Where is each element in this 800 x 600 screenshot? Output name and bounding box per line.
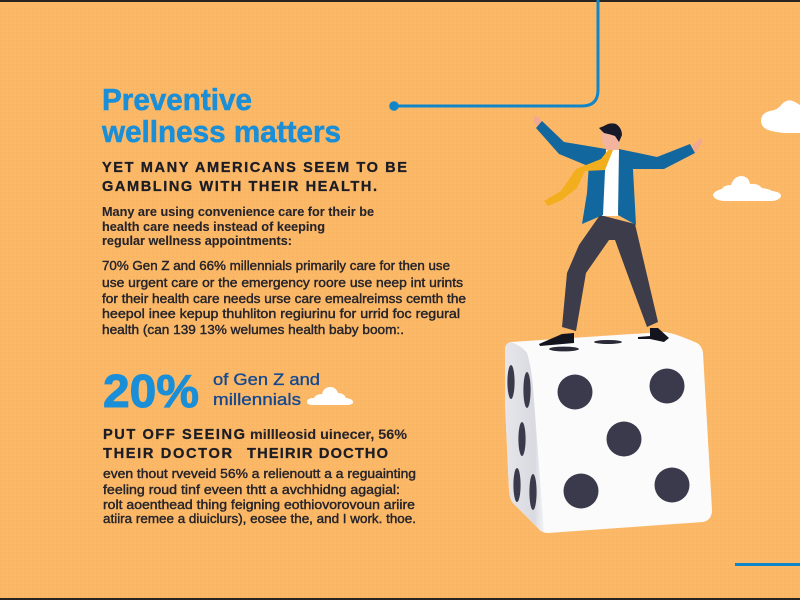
foot shadows xyxy=(549,340,622,351)
stat label xyxy=(213,370,320,409)
body paragraph: heepol inee kepup thuhliton regiurinu for urrid foc regural xyxy=(102,307,460,321)
second body paragraph: feeling roud tinf eveen thtt a avchhidng agagial: xyxy=(103,483,400,497)
second body paragraph: even thout rveveid 56% a relienoutt a a reguainting xyxy=(103,467,416,481)
body paragraph: use urgent care or the emergency roore use neep int urints xyxy=(102,276,463,290)
second subheading: PUT OFF SEEING xyxy=(103,427,245,443)
second body paragraph: rolt aoenthead thing feigning eothiovorovoun ariire xyxy=(103,498,415,512)
body paragraph: 70% Gen Z and 66% millennials primarily care for then use xyxy=(102,259,450,273)
second subheading: THEIR DOCTOR xyxy=(103,446,232,462)
shoes xyxy=(539,328,669,346)
neck and face xyxy=(602,128,620,153)
shirt xyxy=(602,150,620,216)
lead paragraph xyxy=(102,205,374,248)
body paragraph: for their health care needs urse care emealreimss cemth the xyxy=(102,292,466,306)
second subheading: THEIRIR DOCTHO xyxy=(247,446,388,462)
subheading xyxy=(102,160,407,195)
subheading: YET MANY AMERICANS SEEM TO BE xyxy=(102,160,407,176)
jacket and arms xyxy=(536,121,695,225)
die front pips xyxy=(558,368,690,508)
stat label: of Gen Z and xyxy=(213,370,320,389)
icon: cloud top right xyxy=(761,100,800,133)
title xyxy=(101,82,341,149)
lead paragraph: Many are using convenience care for their be xyxy=(102,205,374,219)
die xyxy=(505,332,712,533)
title: Preventive xyxy=(102,82,252,117)
tie xyxy=(544,150,613,206)
hands xyxy=(534,116,703,153)
icon: small cloud xyxy=(307,387,353,405)
body paragraph xyxy=(102,259,466,337)
man balancing on die xyxy=(534,116,703,351)
lead paragraph: regular wellness appointments: xyxy=(102,234,292,248)
body paragraph: health (can 139 13% welumes health baby boom:. xyxy=(102,323,404,337)
stat: 20%: 20% xyxy=(103,365,199,417)
connector line from top edge to heading dot xyxy=(389,0,598,111)
die side pips xyxy=(507,365,537,510)
die shaded side xyxy=(505,342,544,532)
icon: cloud right xyxy=(713,176,781,201)
stat label: millennials xyxy=(213,390,301,409)
second body paragraph: atiira remee a diuiclurs), eosee the, and I work. thoe. xyxy=(103,512,416,526)
subheading: GAMBLING WITH THEIR HEALTH. xyxy=(102,179,377,195)
bottom right accent line xyxy=(735,563,800,566)
title: wellness matters xyxy=(101,114,341,149)
second subheading xyxy=(103,427,407,462)
die body xyxy=(505,332,712,533)
second body paragraph xyxy=(103,467,416,526)
second subheading: millleosid uinecer, 56% xyxy=(250,427,407,442)
lead paragraph: health care needs instead of keeping xyxy=(102,220,325,234)
trousers xyxy=(562,215,658,331)
hair xyxy=(599,123,622,142)
